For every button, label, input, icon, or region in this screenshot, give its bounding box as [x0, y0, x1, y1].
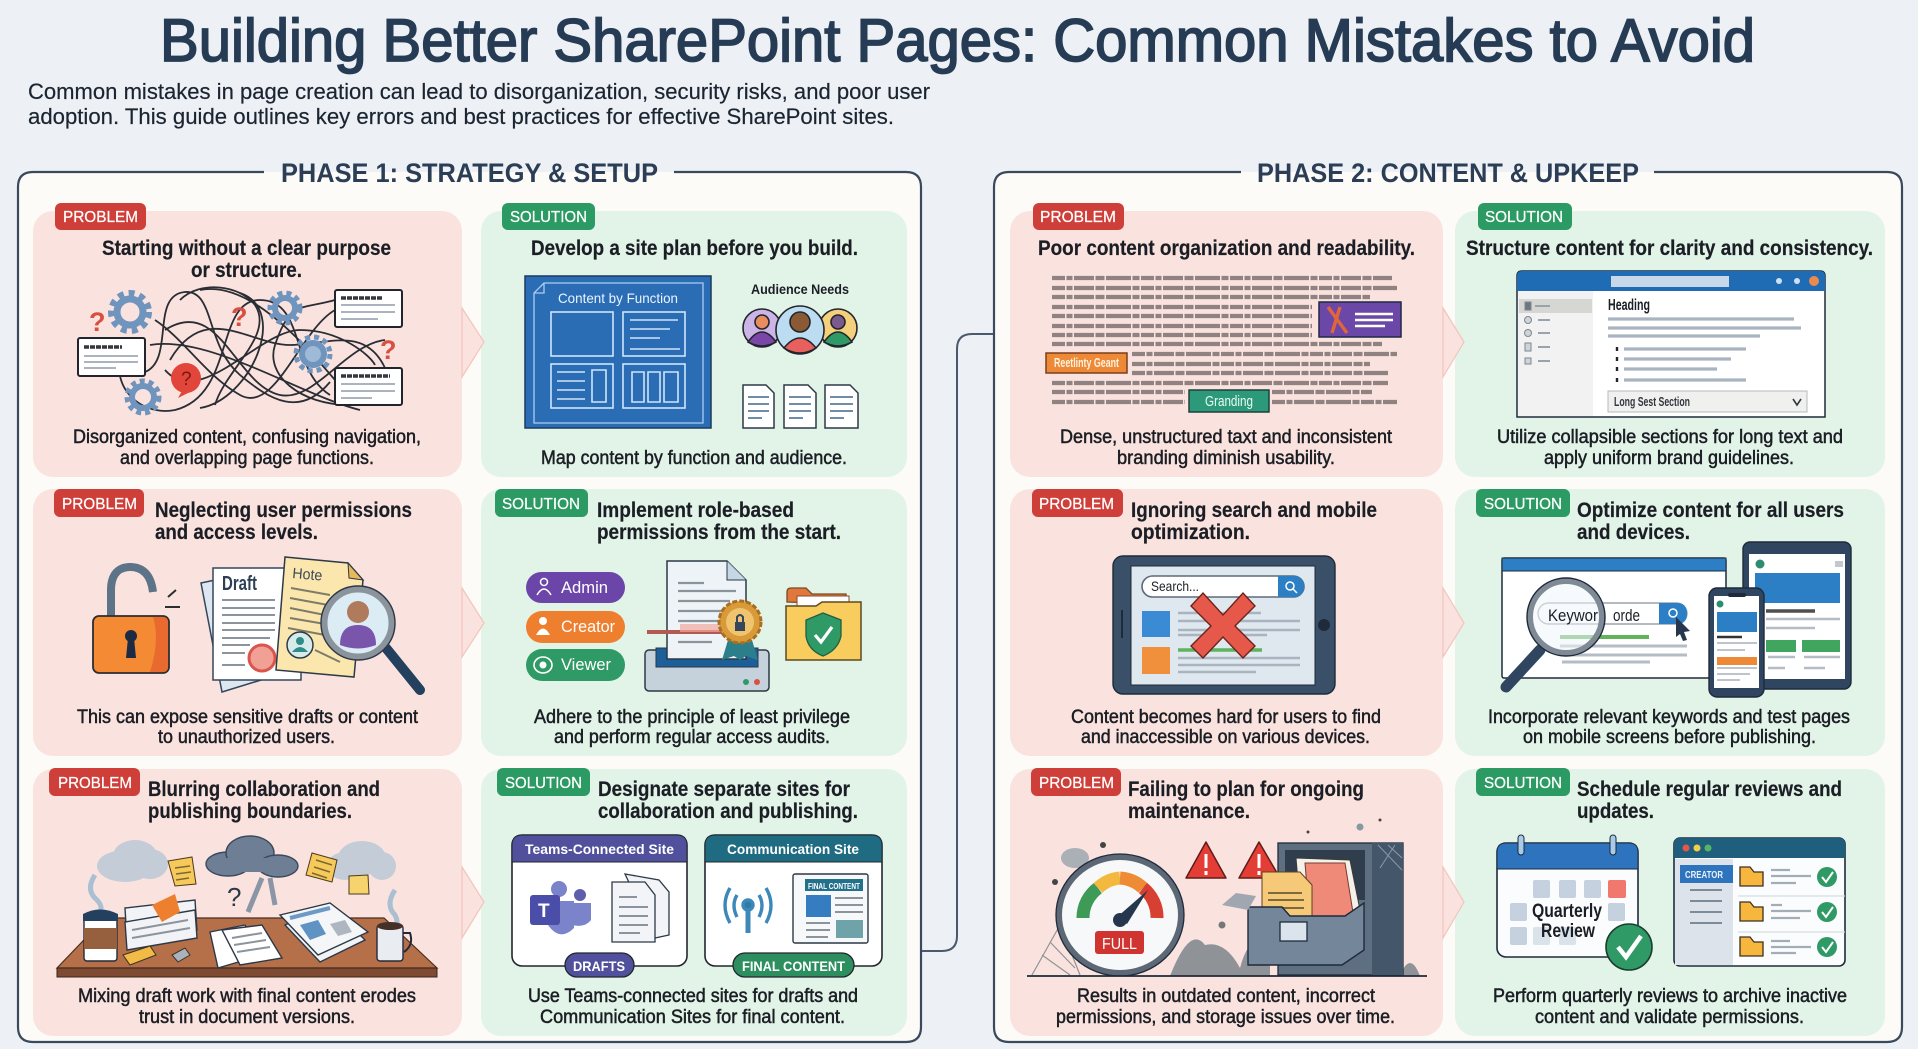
illustration: structured browser page: Long Sest Section: [1614, 395, 1690, 409]
badge: solution: SOLUTION: [505, 775, 582, 792]
caption: Disorganized content, confusing navigation,: [73, 427, 421, 448]
heading: [155, 499, 412, 544]
icon: three documents: [743, 385, 858, 428]
heading: [102, 237, 391, 282]
caption: [1493, 986, 1847, 1028]
icon: tangled lines with gears and questions: ?: [181, 369, 192, 390]
heading: [1128, 778, 1364, 823]
badge: solution: SOLUTION: [510, 209, 587, 226]
card: solution, clarity: [1455, 203, 1885, 477]
icon: tangled lines with gears and questions: ?: [380, 335, 396, 365]
icon: tangled lines with gears and questions: ?: [89, 307, 106, 337]
icon: open padlock: [93, 567, 180, 673]
label: audience needs: Audience Needs: [751, 281, 849, 297]
site card: communication: Communication Site: [727, 841, 859, 857]
box: branding: [1189, 390, 1269, 412]
intro text: [28, 79, 930, 129]
caption: [534, 707, 850, 748]
card: problem, search mobile: [1010, 489, 1443, 756]
icon: newspaper: [793, 874, 868, 943]
warning triangles: [1186, 842, 1280, 878]
pill: final content: FINAL CONTENT: [742, 958, 845, 974]
heading: [598, 778, 858, 823]
badge: solution: SOLUTION: [1484, 496, 1562, 513]
panel: phase 2: [994, 158, 1902, 1042]
heading: Schedule regular reviews and: [1577, 778, 1842, 801]
badge: problem: [55, 203, 146, 230]
box: readability: [1046, 353, 1127, 373]
badge: solution: SOLUTION: [1484, 775, 1562, 792]
badge: problem: [54, 489, 144, 517]
caption: content and validate permissions.: [1535, 1007, 1804, 1028]
arrow: row 3: [462, 867, 484, 938]
arrow: row 2: [1443, 588, 1464, 657]
icon: document boxes: [78, 290, 402, 405]
arrow: row 3: [1443, 867, 1464, 938]
heading: [148, 778, 380, 823]
caption: [1060, 427, 1393, 469]
heading: [1577, 499, 1844, 544]
heading: [1577, 778, 1842, 823]
caption: Content becomes hard for users to find: [1071, 707, 1381, 728]
icon: newspaper: FINAL CONTENT: [808, 882, 860, 891]
caption: and inaccessible on various devices.: [1081, 727, 1370, 748]
heading: Neglecting user permissions: [155, 499, 412, 522]
icon: tablet with failed search: [1113, 556, 1335, 694]
icon: browser, tablet, phone and magnifier: Keywor: [1548, 606, 1598, 625]
icon: blueprint: Content by Function: [558, 290, 678, 306]
badge: solution: [1476, 768, 1570, 796]
box: readability: Reetlinty Geant: [1054, 356, 1120, 370]
box: branding: Granding: [1205, 393, 1253, 410]
badge: problem: PROBLEM: [62, 496, 137, 513]
icon: gauge, warnings and overflowing cabinet: [1027, 818, 1427, 976]
panel: phase 1: [18, 158, 921, 1042]
icon: quarterly review calendar: Review: [1541, 921, 1595, 942]
icon: draft documents: [612, 874, 669, 942]
caption: and perform regular access audits.: [554, 727, 830, 748]
icon: draft and note with magnifier: [201, 557, 420, 692]
icon: audience avatars: [743, 306, 857, 354]
icon: quarterly review calendar: Quarterly: [1532, 901, 1602, 922]
caption: Dense, unstructured taxt and inconsistent: [1060, 427, 1393, 448]
card: problem, no clear purpose: [33, 203, 462, 477]
icon: browser, tablet, phone and magnifier: [1502, 542, 1851, 697]
caption: [1488, 707, 1850, 748]
role pills: Viewer: [561, 655, 611, 674]
icon: tangled lines with gears and questions: [78, 287, 402, 413]
icon: messy desk under clouds: ?: [227, 882, 241, 912]
badge: problem: PROBLEM: [63, 209, 138, 226]
heading: publishing boundaries.: [148, 800, 352, 823]
card: problem, readability: [1010, 203, 1443, 477]
caption: trust in document versions.: [139, 1007, 355, 1028]
caption: [78, 986, 416, 1028]
heading: phase 1: PHASE 1: STRATEGY & SETUP: [281, 158, 658, 188]
card: solution, separate sites: [481, 768, 907, 1036]
caption: Use Teams-connected sites for drafts and: [528, 986, 858, 1007]
badge: solution: [1478, 203, 1572, 230]
caption: Utilize collapsible sections for long text and: [1497, 427, 1843, 448]
badge: problem: [1032, 489, 1123, 517]
arrow: row 2: [462, 588, 484, 657]
illustration: structured browser page: Heading: [1608, 297, 1650, 314]
caption: Results in outdated content, incorrect: [1077, 986, 1376, 1007]
role pills: Admin: [561, 578, 608, 597]
heading: Blurring collaboration and: [148, 778, 380, 801]
heading: Structure content for clarity and consistency.: [1466, 237, 1873, 260]
badge: solution: [1476, 489, 1570, 517]
site card: teams-connected: Teams-Connected Site: [525, 841, 674, 857]
caption: [73, 427, 421, 469]
site card: teams-connected: [512, 835, 687, 977]
caption: Adhere to the principle of least privilege: [534, 707, 850, 728]
icon: draft and note with magnifier: Draft: [222, 573, 257, 595]
heading: or structure.: [191, 259, 302, 282]
role pills: [526, 572, 625, 681]
caption: to unauthorized users.: [158, 727, 335, 748]
badge: solution: [502, 203, 595, 230]
card: problem, maintenance: [1010, 768, 1443, 1036]
heading: Develop a site plan before you build.: [531, 237, 858, 260]
role pills: Creator: [561, 617, 615, 636]
heading: [1131, 499, 1377, 544]
heading: Starting without a clear purpose: [102, 237, 391, 260]
caption: and overlapping page functions.: [120, 448, 374, 469]
heading: maintenance.: [1128, 800, 1250, 823]
icon: tangled lines with gears and questions: ?: [231, 302, 248, 332]
badge: problem: [1033, 203, 1124, 230]
icon: messy desk under clouds: [57, 836, 437, 977]
heading: Designate separate sites for: [598, 778, 850, 801]
pill: final content: [733, 953, 854, 977]
card: solution, role-based: [481, 489, 907, 756]
heading: updates.: [1577, 800, 1654, 823]
caption: Communication Sites for final content.: [540, 1007, 845, 1028]
heading: Failing to plan for ongoing: [1128, 778, 1364, 801]
arrow: row 1: [1443, 308, 1464, 377]
caption: [77, 707, 419, 748]
icon: shield folder: [786, 588, 861, 660]
illustration: dense text block: [1046, 278, 1401, 412]
gauge: [1056, 854, 1184, 976]
icon: teams logo: [530, 881, 591, 934]
pill: drafts: DRAFTS: [573, 958, 625, 974]
box: tools callout: [1319, 302, 1401, 337]
badge: problem: PROBLEM: [1039, 775, 1114, 792]
badge: solution: SOLUTION: [1485, 209, 1563, 226]
icon: broadcast signal: [725, 888, 771, 933]
arrow: row 1: [462, 308, 484, 377]
caption: Perform quarterly reviews to archive inactive: [1493, 986, 1847, 1007]
card: solution, reviews: [1455, 768, 1885, 1036]
heading: [597, 499, 841, 544]
heading: and devices.: [1577, 521, 1690, 544]
icon: creator site window: [1674, 838, 1845, 966]
illustration: structured browser page: [1517, 271, 1825, 417]
badge: solution: SOLUTION: [502, 496, 580, 513]
caption: Map content by function and audience.: [541, 448, 847, 469]
heading: permissions from the start.: [597, 521, 841, 544]
heading: Implement role-based: [597, 499, 794, 522]
caption: Mixing draft work with final content erodes: [78, 986, 416, 1007]
gauge: FULL: [1102, 936, 1137, 953]
heading: and access levels.: [155, 521, 318, 544]
badge: problem: [1031, 768, 1121, 796]
icon: blueprint: [525, 276, 711, 428]
card: solution, site plan: [481, 203, 907, 477]
filing cabinet: [1248, 843, 1403, 975]
card: problem, permissions: [33, 489, 462, 756]
badge: problem: PROBLEM: [1039, 496, 1114, 513]
heading: Poor content organization and readability.: [1038, 237, 1415, 260]
badge: problem: [49, 768, 140, 796]
heading: collaboration and publishing.: [598, 800, 858, 823]
intro text: adoption. This guide outlines key errors and best practices for effective SharePoint sites.: [28, 104, 894, 129]
arrow: connector between phases: [922, 334, 994, 951]
badge: problem: PROBLEM: [58, 775, 132, 792]
badge: solution: [497, 768, 590, 796]
caption: branding diminish usability.: [1117, 448, 1335, 469]
intro text: Common mistakes in page creation can lead to disorganization, security risks, and poor user: [28, 79, 930, 104]
caption: [1071, 707, 1381, 748]
caption: [1056, 986, 1395, 1028]
icon: document on server with seal: [645, 561, 769, 691]
caption: [1497, 427, 1843, 469]
card: solution, all devices: [1455, 489, 1885, 756]
icon: tablet with failed search: Search...: [1151, 578, 1199, 594]
site card: communication: [705, 835, 882, 977]
icon: teams logo: T: [538, 901, 550, 922]
badge: solution: [495, 489, 588, 517]
caption: This can expose sensitive drafts or content: [77, 707, 419, 728]
caption: apply uniform brand guidelines.: [1544, 448, 1794, 469]
title: Building Better SharePoint Pages: Common Mistakes to Avoid: [160, 7, 1755, 74]
icon: creator site window: CREATOR: [1685, 870, 1724, 881]
icon: draft and note with magnifier: Hote: [292, 565, 323, 585]
badge: problem: PROBLEM: [1040, 209, 1116, 226]
icon: browser, tablet, phone and magnifier: orde: [1613, 606, 1640, 625]
caption: [528, 986, 858, 1028]
icon: quarterly review calendar: [1497, 835, 1652, 970]
heading: optimization.: [1131, 521, 1250, 544]
caption: permissions, and storage issues over time.: [1056, 1007, 1395, 1028]
card: problem, blurring: [33, 768, 462, 1036]
pill: drafts: [565, 953, 634, 977]
heading: phase 2: PHASE 2: CONTENT & UPKEEP: [1257, 158, 1639, 188]
caption: Incorporate relevant keywords and test pages: [1488, 707, 1850, 728]
heading: Ignoring search and mobile: [1131, 499, 1377, 522]
caption: on mobile screens before publishing.: [1523, 727, 1816, 748]
heading: Optimize content for all users: [1577, 499, 1844, 522]
